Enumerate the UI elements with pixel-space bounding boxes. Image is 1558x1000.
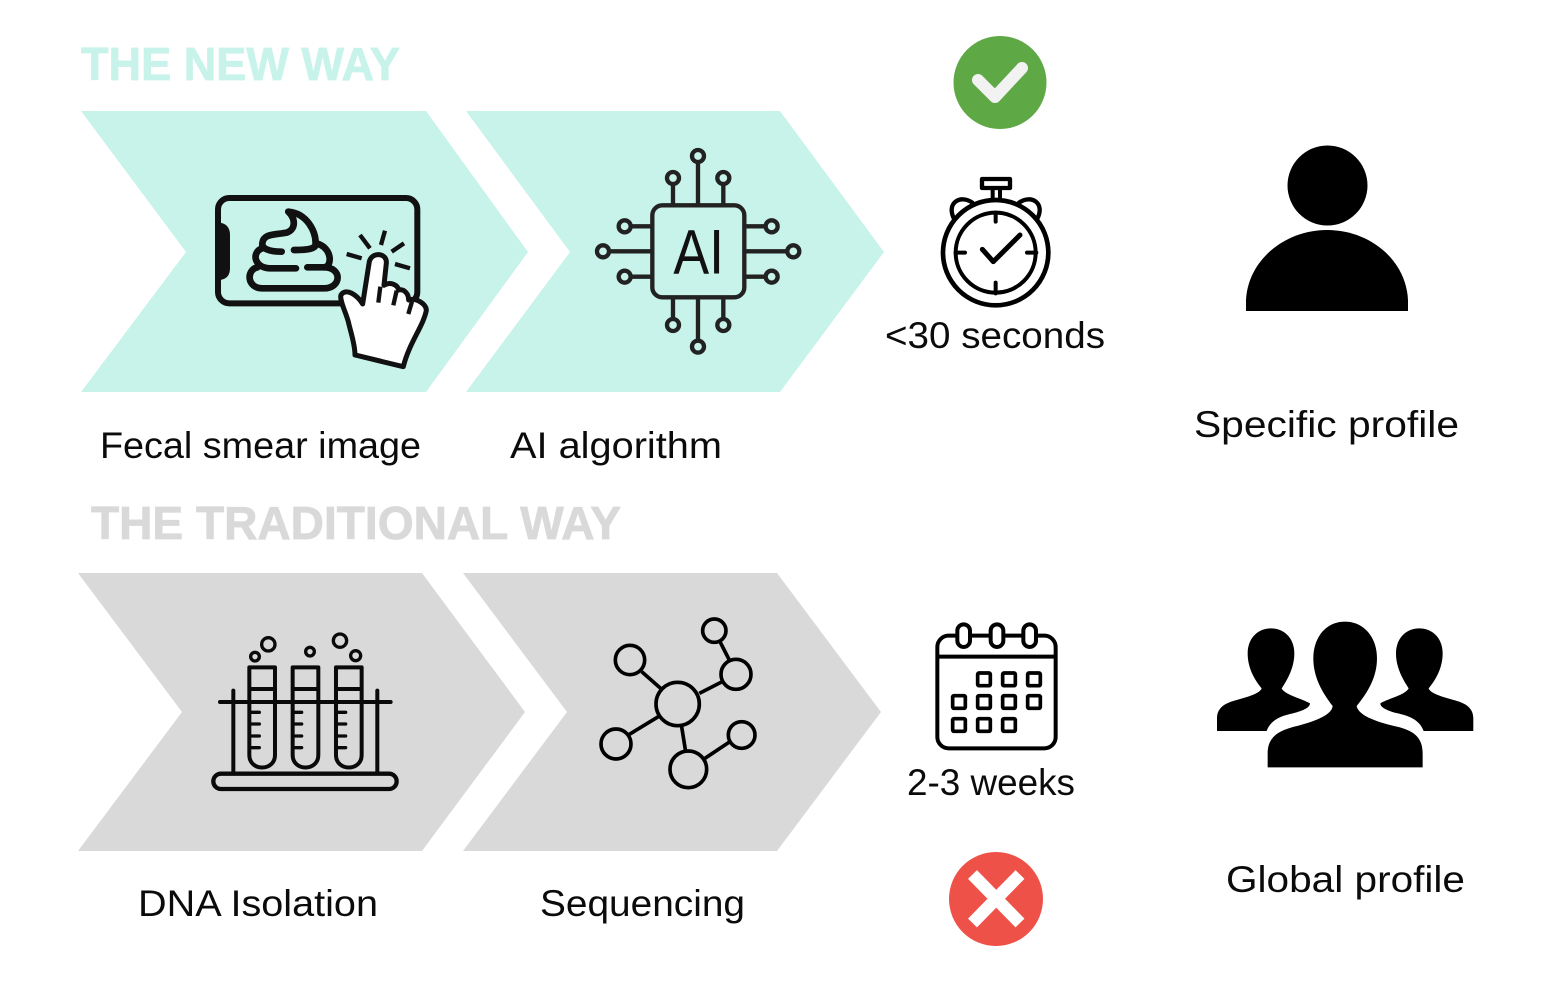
icon: AI chip — [597, 150, 799, 353]
chevron: AI algorithm step — [466, 111, 884, 392]
icon: red cross badge — [949, 852, 1043, 946]
heading: the new way: THE NEW WAY — [81, 38, 400, 90]
icon: AI chip: AI — [673, 218, 724, 288]
icon: molecular network — [601, 619, 755, 788]
label: DNA isolation: DNA Isolation — [138, 883, 378, 924]
icon: stopwatch — [943, 179, 1048, 305]
icon: green check badge — [954, 36, 1046, 129]
label: specific profile: Specific profile — [1194, 404, 1459, 445]
chevron: fecal smear image step — [81, 111, 528, 392]
icon: calendar — [937, 624, 1056, 748]
label: global profile: Global profile — [1226, 859, 1465, 900]
label: AI algorithm: AI algorithm — [510, 425, 722, 466]
icon: group of people — [1217, 622, 1473, 767]
label: under 30 seconds: <30 seconds — [885, 315, 1105, 356]
icon: phone with fecal image and tapping hand — [218, 198, 426, 367]
icon: single person — [1246, 146, 1408, 311]
icon: test tubes in rack — [213, 634, 397, 789]
chevron: DNA isolation step — [78, 573, 525, 851]
label: sequencing: Sequencing — [540, 883, 745, 924]
label: fecal smear image: Fecal smear image — [100, 425, 421, 466]
label: 2-3 weeks: 2-3 weeks — [907, 762, 1075, 803]
heading: the traditional way: THE TRADITIONAL WAY — [91, 497, 621, 549]
chevron: sequencing step — [463, 573, 881, 851]
